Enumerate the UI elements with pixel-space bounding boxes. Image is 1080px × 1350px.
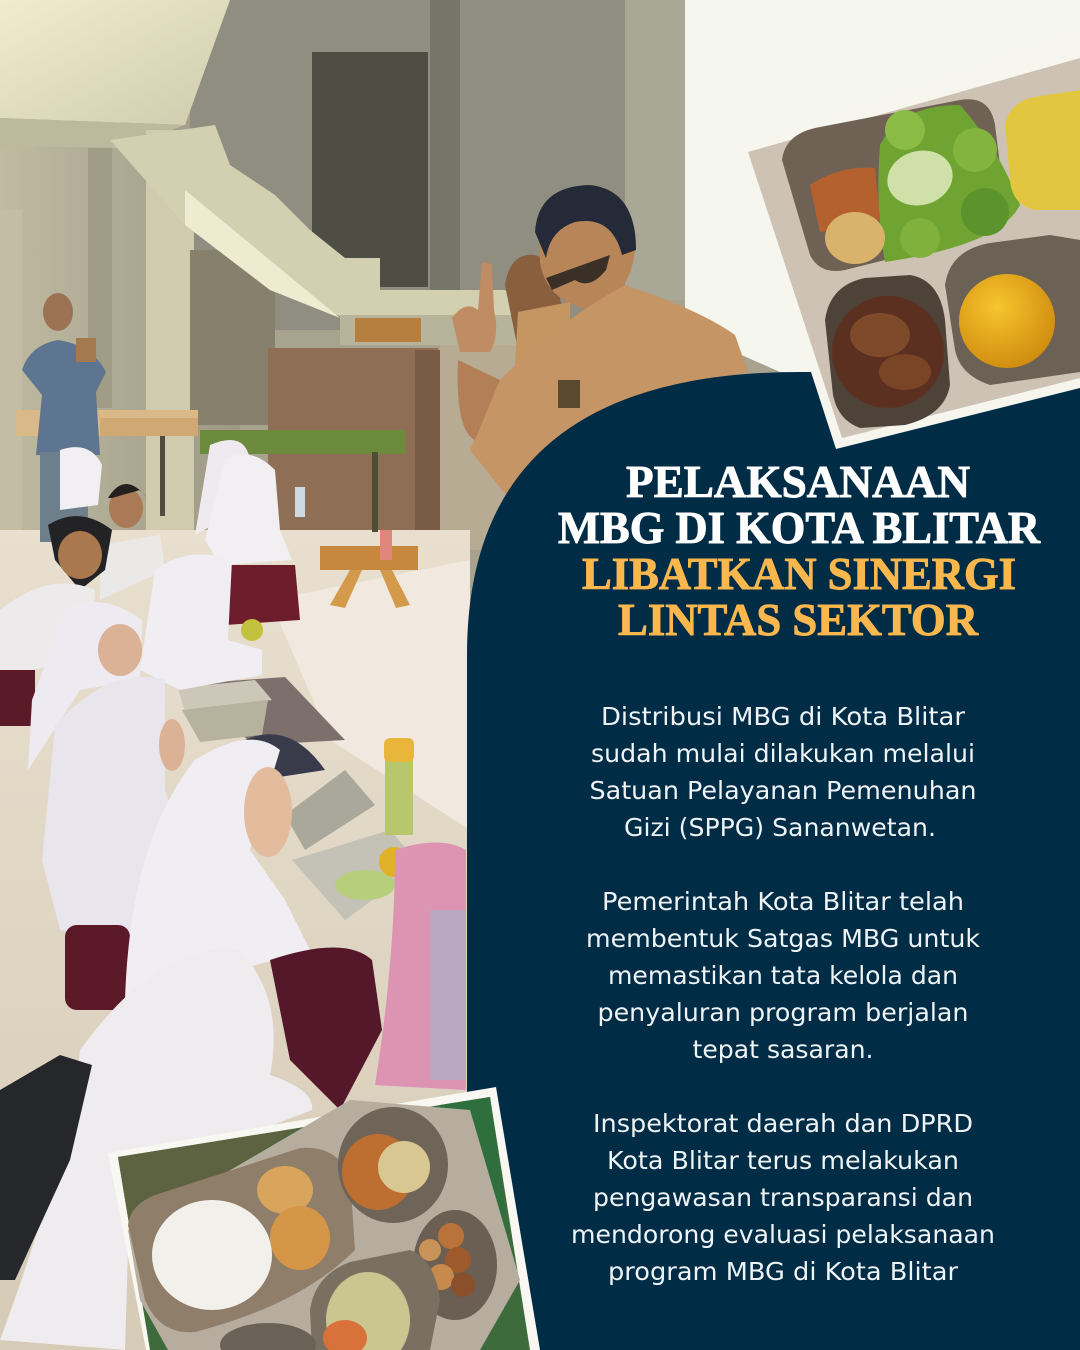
text block: task force: membentuk Satgas MBG untuk [586,924,981,953]
text block: distribution [590,702,976,842]
photo: bottom left lunch tray [108,1087,540,1350]
text block: oversight [571,1109,995,1286]
panel: dark navy curved text background [467,372,1080,1350]
title: PELAKSANAAN [626,456,970,507]
text block: task force [586,887,981,1064]
text block: distribution: sudah mulai dilakukan melalui [591,739,975,768]
tray compartment: fried tempeh [825,275,950,428]
man in uniform [452,185,748,510]
text block: distribution: Satuan Pelayanan Pemenuhan [590,776,976,805]
text block: oversight: mendorong evaluasi pelaksanaan [571,1220,995,1249]
tables [16,410,418,608]
text block: distribution: Gizi (SPPG) Sananwetan. [624,813,936,842]
text block: task force: tepat sasaran. [692,1035,874,1064]
tray compartment: orange [945,235,1080,385]
text block: task force: penyaluran program berjalan [598,998,968,1027]
text block: oversight: Inspektorat daerah dan DPRD [593,1109,973,1138]
text block: oversight: Kota Blitar terus melakukan [607,1146,959,1175]
text block: oversight: pengawasan transparansi dan [593,1183,973,1212]
tray compartment: meatballs [413,1210,497,1320]
photo: top right lunch tray [738,28,1080,449]
seated children [0,440,382,1350]
tray compartment: vegetables [310,1250,440,1350]
title [558,456,1041,645]
trays and supplies on the floor [175,677,466,1090]
tray compartment: yellow rice [1005,90,1080,210]
text block: oversight: program MBG di Kota Blitar [608,1257,959,1286]
title: LIBATKAN SINERGI [582,548,1016,599]
tray compartment: tempeh and lettuce [782,99,1020,271]
text block: task force: Pemerintah Kota Blitar telah [602,887,964,916]
tray compartment: bottom cup [220,1323,316,1350]
title: LINTAS SEKTOR [618,594,979,645]
tray compartment: soup and dumpling [338,1107,448,1223]
tray compartment: rice and fritters [128,1148,355,1332]
man with phone [22,293,106,542]
title: MBG DI KOTA BLITAR [558,502,1041,553]
text block: distribution: Distribusi MBG di Kota Blitar [601,702,966,731]
text block: task force: memastikan tata kelola dan [608,961,958,990]
